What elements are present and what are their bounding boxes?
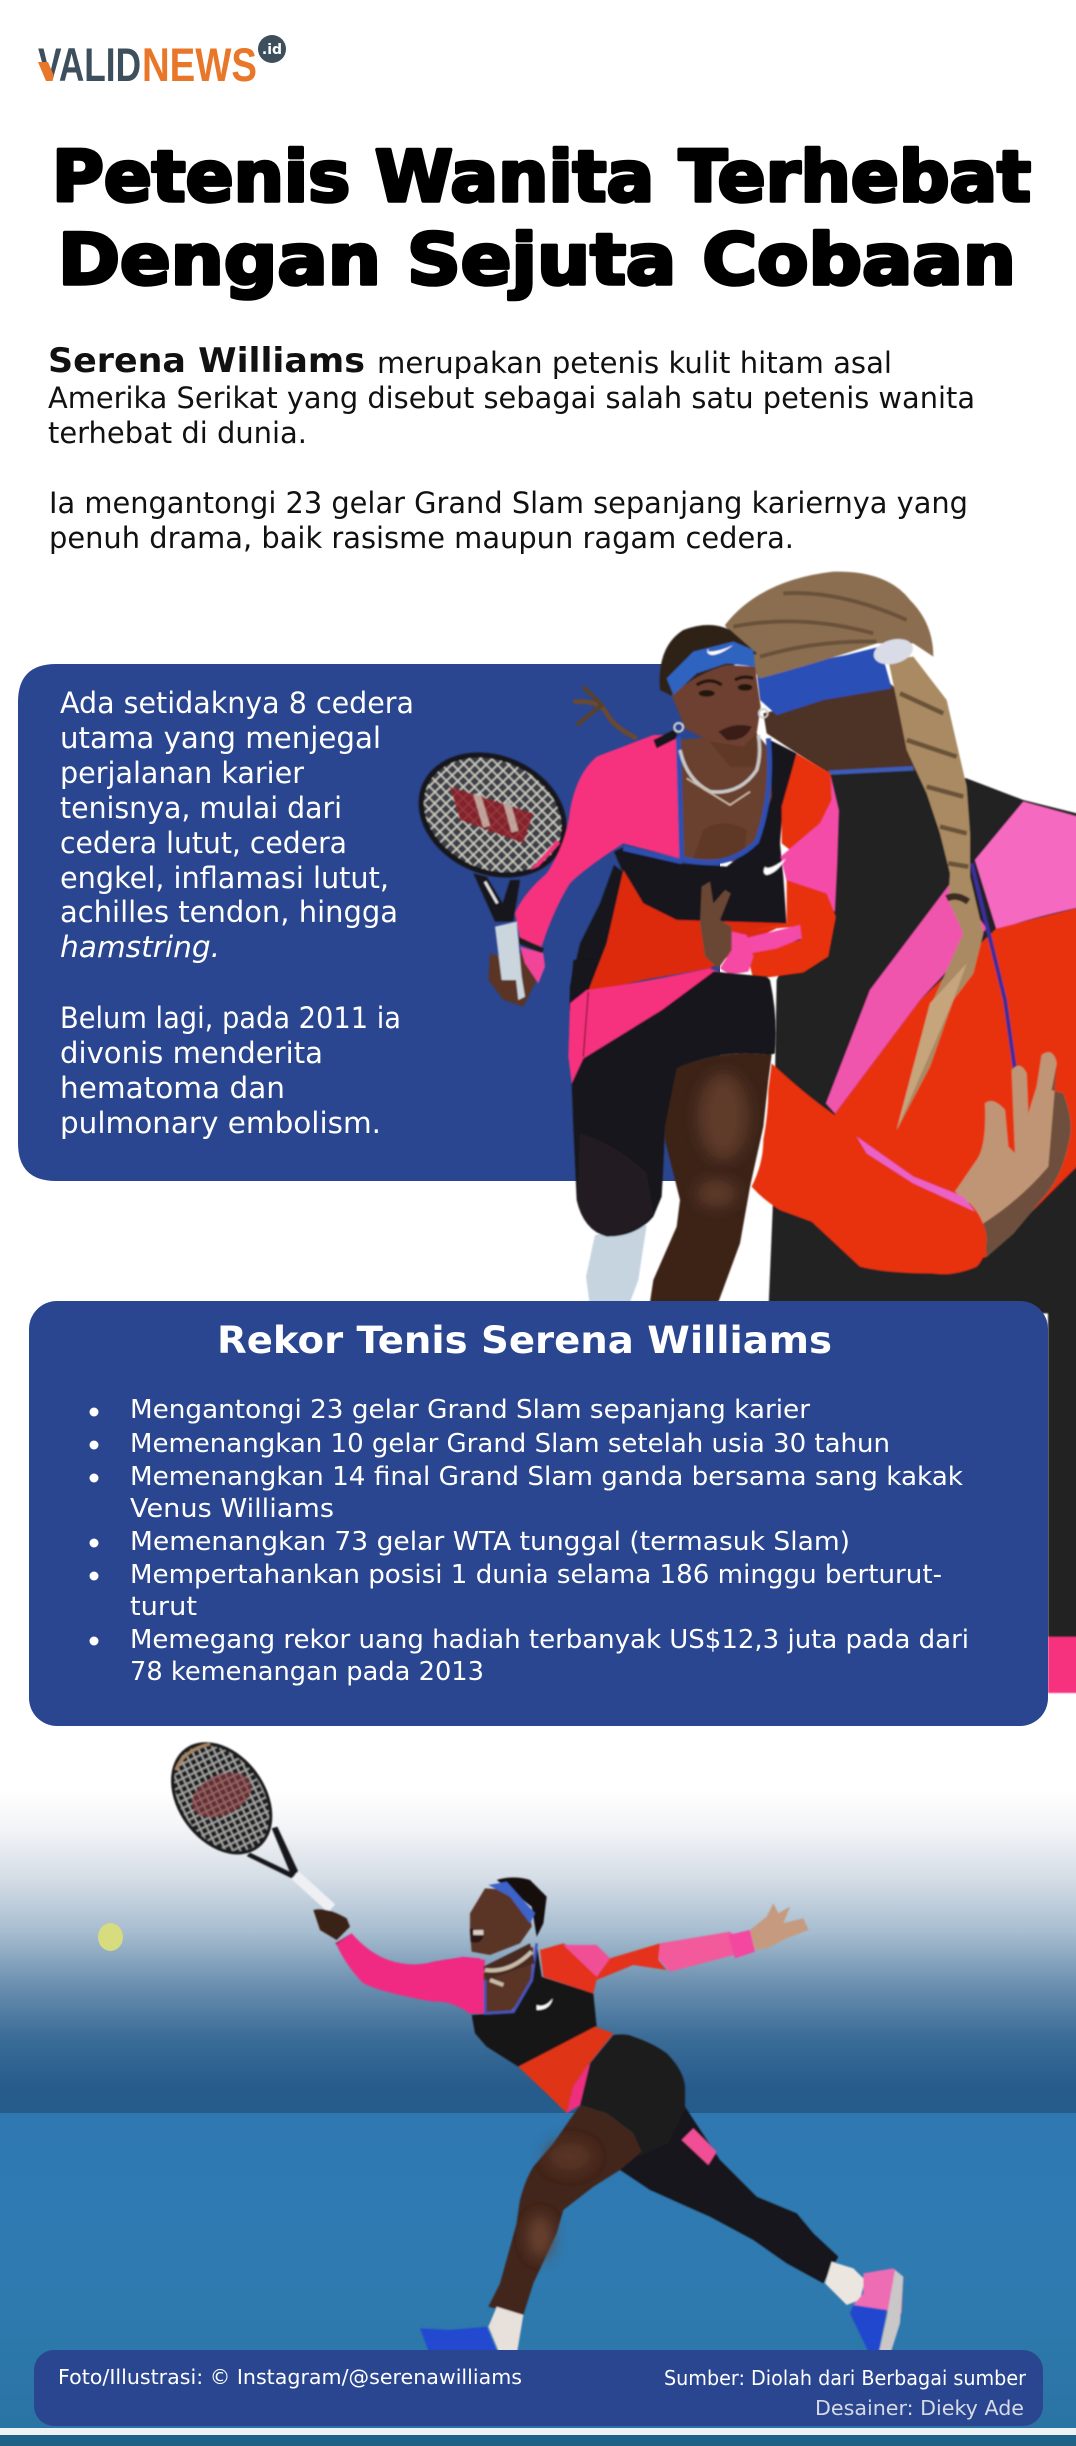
forearm: [747, 880, 836, 979]
injuries text: perjalanan karier: [60, 756, 304, 790]
injuries text: pulmonary embolism.: [60, 1106, 381, 1140]
hair: [497, 1878, 547, 1937]
tennis ball: [98, 1923, 123, 1951]
records list: Mempertahankan posisi 1 dunia selama 186 minggu berturut-: [130, 1560, 942, 1590]
logo: Validnews.id: VALID: [38, 38, 141, 91]
earrings and necklace: [674, 723, 683, 732]
records list: Memenangkan 10 gelar Grand Slam setelah usia 30 tahun: [130, 1429, 890, 1459]
injuries text: engkel, inflamasi lutut,: [60, 861, 389, 895]
chest: [483, 1947, 533, 2013]
records list: 78 kemenangan pada 2013: [130, 1657, 484, 1687]
injuries text: Ada setidaknya 8 cedera: [60, 686, 414, 720]
injuries text: achilles tendon, hingga: [60, 895, 398, 929]
orange arm: [752, 1063, 987, 1274]
hand: [955, 1052, 1071, 1257]
intro text: penuh drama, baik rasisme maupun ragam cedera.: [49, 521, 794, 555]
footer panel: [34, 2350, 1043, 2426]
shorts and left leg: [572, 972, 776, 1237]
designer credit: Desainer: Dieky Ade: [815, 2396, 1024, 2420]
records list: Venus Williams: [130, 1494, 334, 1524]
neck and chest: [677, 733, 780, 862]
panel: tennis records: [29, 1301, 1048, 1726]
bodice: [472, 1943, 597, 2067]
pink diagonal band: [826, 882, 987, 1113]
pink shoulder: [975, 802, 1076, 930]
records list: Memenangkan 14 final Grand Slam ganda bersama sang kakak: [130, 1462, 963, 1492]
left sleeve: [418, 1957, 485, 2013]
photo: Serena front upper body: [402, 625, 839, 1013]
hair and face: [660, 625, 757, 697]
title: Petenis Wanita Terhebat: [52, 136, 1031, 218]
back leg: [620, 2107, 838, 2283]
logo: Validnews.id: [38, 35, 286, 91]
racket handle: [495, 922, 525, 1000]
face: [470, 1888, 532, 1955]
records list: Mengantongi 23 gelar Grand Slam sepanjang karier: [130, 1395, 810, 1425]
pink hip panel: [568, 972, 713, 1083]
title: Dengan Sejuta Cobaan: [58, 219, 1016, 301]
records list: Memenangkan 73 gelar WTA tunggal (termasuk Slam): [130, 1527, 850, 1557]
right arm: [540, 1943, 600, 1993]
shoe: [586, 1225, 647, 1307]
red torso: [518, 2027, 613, 2113]
records list: Memegang rekor uang hadiah terbanyak US$12,3 juta pada dari: [130, 1625, 969, 1655]
left hand: [488, 953, 538, 1007]
intro text: merupakan petenis kulit hitam asal: [377, 346, 892, 380]
headband: [488, 1882, 535, 1923]
logo: Validnews.id: NEWS: [142, 38, 257, 91]
records list: [90, 1395, 969, 1687]
photo: Serena from behind: [725, 572, 1076, 1693]
neckline: [828, 768, 913, 773]
shorts: [580, 2034, 685, 2157]
photo: Serena front legs: [568, 960, 776, 1307]
back shoe and sock: [825, 2262, 865, 2305]
injuries text: divonis menderita: [60, 1036, 323, 1070]
panel: injuries background: [18, 664, 720, 1181]
red back: [810, 905, 1076, 1273]
records list: turut: [130, 1592, 197, 1622]
intro text: terhebat di dunia.: [48, 416, 307, 450]
scrunchie: [871, 635, 916, 668]
injuries text: cedera lutut, cedera: [60, 826, 347, 860]
racket: [402, 733, 583, 897]
intro text: Amerika Serikat yang disebut sebagai salah satu petenis wanita: [48, 381, 975, 415]
neck: [763, 683, 920, 774]
facial features: [697, 677, 753, 685]
headband: [667, 642, 755, 695]
strap: [972, 863, 1015, 1070]
front shoe and sock: [420, 2327, 498, 2355]
torso side: [570, 865, 625, 1010]
right hand: [700, 882, 732, 968]
injuries text: hematoma dan: [60, 1071, 285, 1105]
black bodice: [614, 740, 797, 926]
intro text: Ia mengantongi 23 gelar Grand Slam sepanjang kariernya yang: [49, 486, 968, 520]
hair: [725, 572, 933, 678]
photo: Serena lunging body: [418, 1878, 903, 2355]
photo: Serena lunging racket and arm: [152, 1725, 487, 2013]
title: [52, 136, 1031, 301]
background: tennis court gradient: [0, 1790, 1076, 2446]
injuries text: tenisnya, mulai dari: [60, 791, 342, 825]
back body: [768, 767, 1076, 1637]
intro text: [48, 341, 975, 555]
records heading: Rekor Tenis Serena Williams: [217, 1319, 832, 1362]
swoosh: [764, 858, 786, 875]
right leg: [649, 1053, 772, 1307]
injuries text: Belum lagi, pada 2011 ia: [60, 1001, 401, 1035]
back headband: [757, 647, 892, 715]
front leg: [488, 2105, 642, 2315]
right shoulder: [782, 753, 833, 850]
injuries text: hamstring.: [60, 930, 220, 964]
neck: [483, 1943, 535, 1980]
braid: [888, 657, 983, 1130]
source credit: Sumber: Diolah dari Berbagai sumber: [664, 2366, 1027, 2390]
injuries text: [60, 686, 414, 1140]
pink sleeve: [515, 735, 680, 947]
logo: Validnews.id: .id: [262, 42, 282, 58]
intro text: Serena Williams: [48, 341, 365, 381]
injuries text: utama yang menjegal: [60, 721, 381, 755]
blue trim: [623, 737, 769, 862]
photo credit: Foto/Illustrasi: © Instagram/@serenawilliams: [58, 2365, 522, 2389]
ponytail: [573, 701, 637, 738]
